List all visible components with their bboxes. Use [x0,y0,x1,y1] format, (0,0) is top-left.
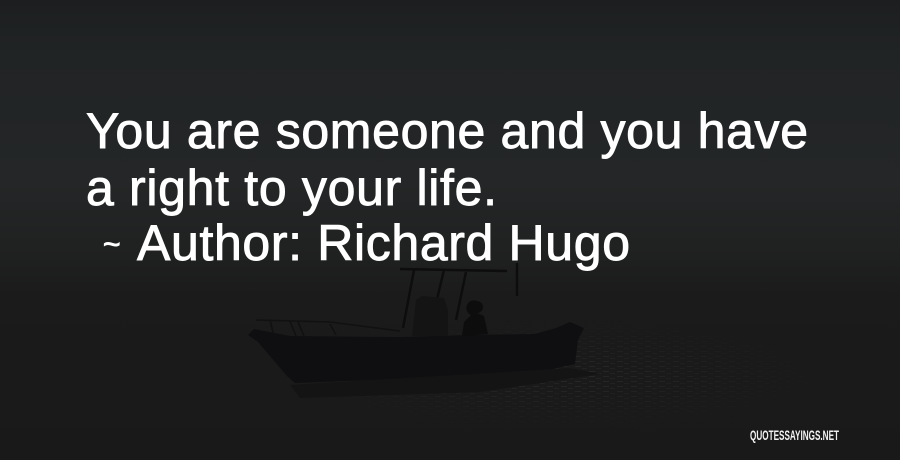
boat bow rail [256,320,400,336]
watermark: QUOTESSAYINGS.NET [750,428,839,443]
quote line 1: You are someone and you have [86,103,808,159]
water ripples [491,356,674,397]
quote line 2: a right to your life. [86,160,497,216]
boat pilot figure [462,300,488,336]
boat reflection [290,368,600,398]
boat cabin [412,296,448,336]
boat hull [248,322,584,383]
boat T-top frame [400,263,517,328]
author line: Author: Richard Hugo [137,215,630,271]
quote text [86,103,808,271]
author tilde: ~ [103,228,121,261]
boat silhouette [248,263,584,383]
